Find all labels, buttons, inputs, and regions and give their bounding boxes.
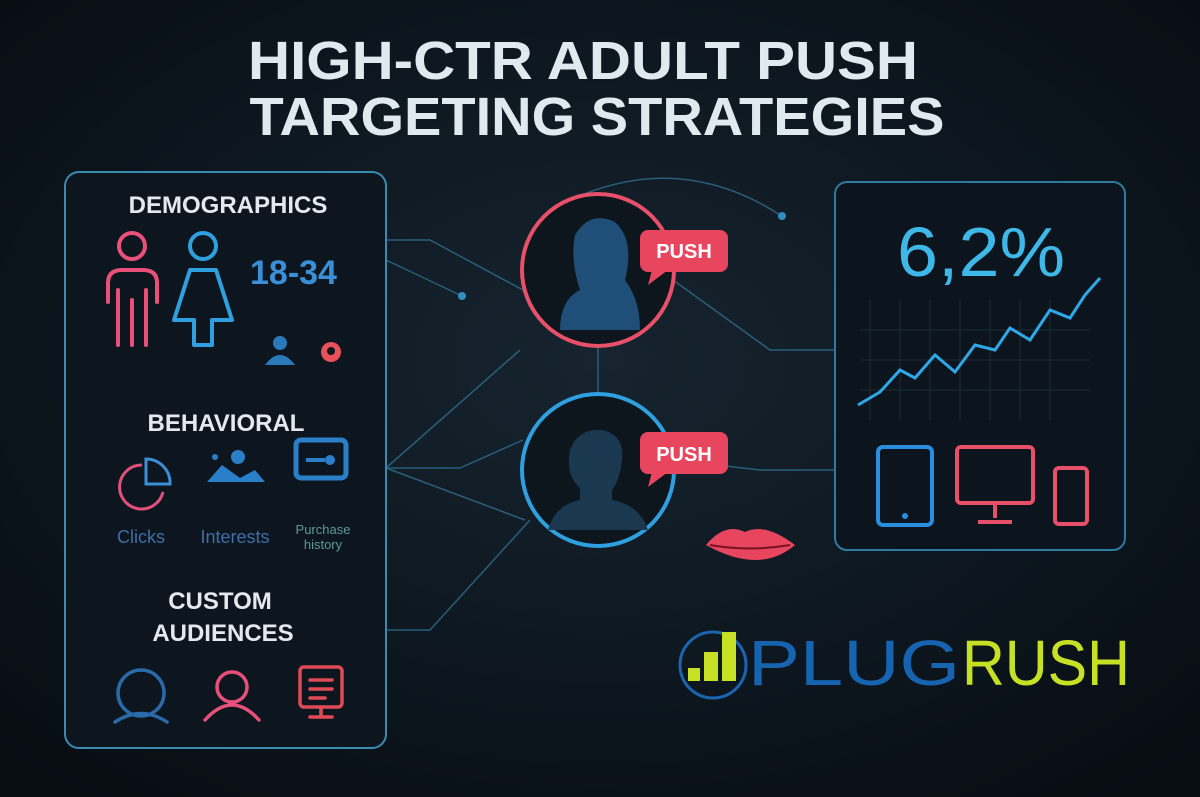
panel: targeting <box>65 172 386 748</box>
heading: demographics: DEMOGRAPHICS <box>129 192 327 219</box>
icon: phone <box>1055 468 1087 524</box>
icon: female figure <box>174 233 232 345</box>
line chart <box>858 278 1100 420</box>
callout: push 2: PUSH <box>656 444 712 466</box>
heading: custom audiences <box>152 588 294 647</box>
panel: targeting: Purchase <box>296 522 350 537</box>
title: HIGH-CTR ADULT PUSH <box>248 31 918 91</box>
heading: custom audiences: CUSTOM <box>168 588 272 615</box>
panel: targeting: history <box>304 537 343 552</box>
icon: monitor <box>957 447 1033 522</box>
icon: location pin <box>321 342 341 362</box>
logo: plugrush <box>680 627 1130 699</box>
panel: targeting: Interests <box>200 527 270 547</box>
icon: interests <box>207 450 265 482</box>
icon: purchase history <box>296 440 346 478</box>
panel: results <box>835 182 1125 550</box>
icon: clicks <box>120 459 170 509</box>
age range: 18-34 <box>250 254 337 292</box>
icon: lips <box>706 529 795 560</box>
callout: push 1: PUSH <box>656 241 712 263</box>
heading: behavioral: BEHAVIORAL <box>148 410 304 437</box>
circle: female profile <box>522 194 674 346</box>
callout: push 2 <box>640 432 728 487</box>
icon: tablet <box>878 447 932 525</box>
circle: male profile <box>522 394 674 546</box>
connector lines <box>386 178 835 630</box>
logo: plugrush: RUSH <box>962 627 1130 699</box>
icon: male figure <box>108 233 157 345</box>
callout: push 1 <box>640 230 728 285</box>
logo: plugrush: PLUG <box>748 627 960 699</box>
title: TARGETING STRATEGIES <box>250 87 944 147</box>
labels: Clicks <box>117 527 165 547</box>
icon: person <box>265 336 295 365</box>
icons: audiences <box>115 667 342 722</box>
heading: custom audiences: AUDIENCES <box>152 620 294 647</box>
stat: 6,2% <box>897 213 1065 291</box>
title <box>248 31 944 147</box>
